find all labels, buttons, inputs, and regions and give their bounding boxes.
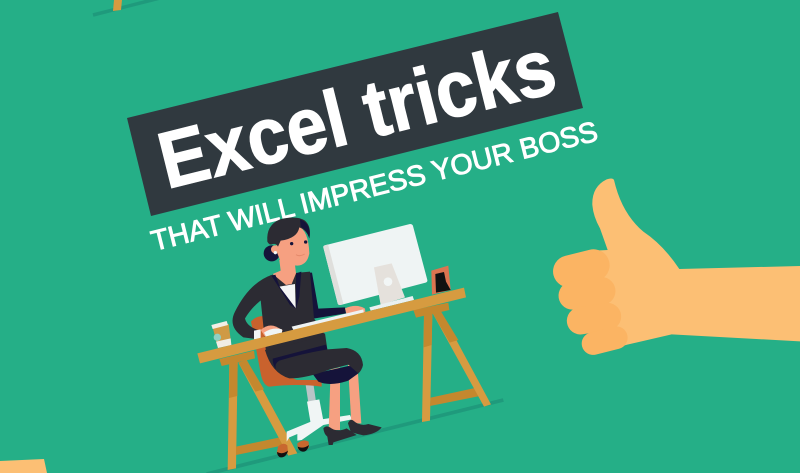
hair bun bbox=[264, 245, 280, 261]
cuff and hand bbox=[254, 329, 261, 339]
title banner bbox=[127, 12, 583, 216]
desk legs bbox=[228, 311, 491, 470]
icon: arm fragment at bottom edge bbox=[0, 459, 47, 473]
skirt bbox=[265, 333, 363, 378]
hair bbox=[267, 217, 310, 247]
eyes and mouth bbox=[290, 242, 293, 245]
ear bbox=[271, 245, 279, 253]
office chair bbox=[251, 316, 352, 457]
illustration: woman working at desk bbox=[197, 217, 503, 473]
jacket bbox=[261, 272, 325, 352]
hand on keyboard bbox=[345, 306, 365, 315]
title text: Excel tricks bbox=[150, 21, 564, 205]
monitor bbox=[323, 224, 427, 311]
front arm bbox=[233, 274, 273, 339]
blouse bbox=[279, 284, 296, 308]
icon: thumbs-up hand bbox=[550, 178, 800, 357]
neck bbox=[273, 257, 296, 285]
waist stripe bbox=[273, 345, 327, 369]
coffee cup bbox=[211, 321, 231, 348]
keyboard bbox=[292, 309, 364, 330]
face bbox=[276, 227, 309, 266]
lapels bbox=[272, 275, 296, 309]
woman bbox=[233, 217, 382, 445]
desk top bbox=[197, 288, 466, 366]
floor shadow bbox=[207, 400, 503, 473]
fingers bbox=[550, 246, 630, 357]
shoes bbox=[323, 426, 357, 445]
back arm bbox=[307, 273, 346, 319]
photo frame bbox=[431, 266, 451, 295]
hand and arm bbox=[583, 178, 800, 354]
subtitle: THAT WILL IMPRESS YOUR BOSS bbox=[148, 116, 601, 258]
icon: desk fragment at top edge bbox=[93, 0, 160, 15]
legs bbox=[329, 367, 340, 430]
skirt underside bbox=[313, 366, 363, 384]
